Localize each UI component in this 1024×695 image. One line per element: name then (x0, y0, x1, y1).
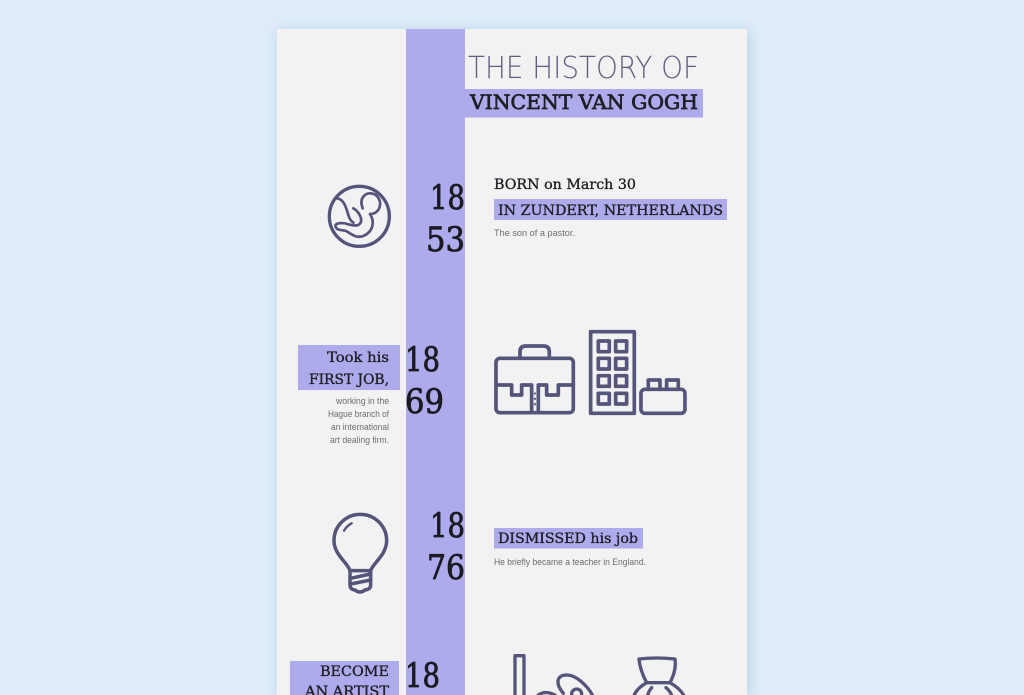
year: partial 18: 18 (405, 656, 440, 695)
text: first job (298, 345, 400, 445)
year: 1853: 53 (426, 220, 465, 260)
text: first job: Took his (327, 350, 389, 366)
title (465, 51, 703, 118)
panel: poster background (277, 29, 747, 695)
text: first job: an international (331, 422, 389, 432)
text: born: The son of a pastor. (494, 228, 575, 238)
event: 1876 (334, 506, 646, 592)
icon: embryo (329, 186, 389, 246)
year: 1853: 18 (430, 178, 465, 218)
text: first job: Hague branch of (328, 409, 389, 419)
icon: money bag (634, 658, 684, 695)
event: become an artist (290, 656, 684, 695)
icon: paintbrush and palette (515, 656, 593, 695)
icon: briefcase (496, 346, 573, 413)
text: dismissed: He briefly became a teacher in England. (494, 557, 646, 567)
event: 1853 (329, 177, 727, 260)
icon: light bulb (334, 514, 387, 592)
year: 1876 (427, 506, 465, 588)
timeline band (406, 29, 465, 695)
text: first job: working in the (335, 396, 389, 406)
year: 1876: 76 (427, 548, 465, 588)
text: first job: FIRST JOB, (309, 372, 389, 388)
title: VINCENT VAN GOGH (469, 90, 698, 114)
text: dismissed: DISMISSED his job (498, 531, 638, 547)
year: 1876: 18 (430, 506, 465, 546)
year: 1853 (426, 178, 465, 260)
text: born: IN ZUNDERT, NETHERLANDS (498, 203, 723, 219)
text: become an artist (290, 661, 399, 695)
text: born: BORN on March 30 (494, 177, 636, 193)
icon: small building block (641, 380, 685, 413)
icon: office building (591, 332, 634, 413)
title: THE HISTORY OF (468, 51, 699, 86)
year: 1869 (405, 340, 444, 422)
year: 1869: 69 (405, 382, 444, 422)
event: 1869 (298, 332, 685, 445)
text: become an artist: BECOME (320, 664, 389, 680)
text: first job: art dealing firm. (330, 435, 389, 445)
text: dismissed (494, 528, 646, 567)
year: 1869: 18 (405, 340, 440, 380)
text: born (494, 177, 727, 238)
